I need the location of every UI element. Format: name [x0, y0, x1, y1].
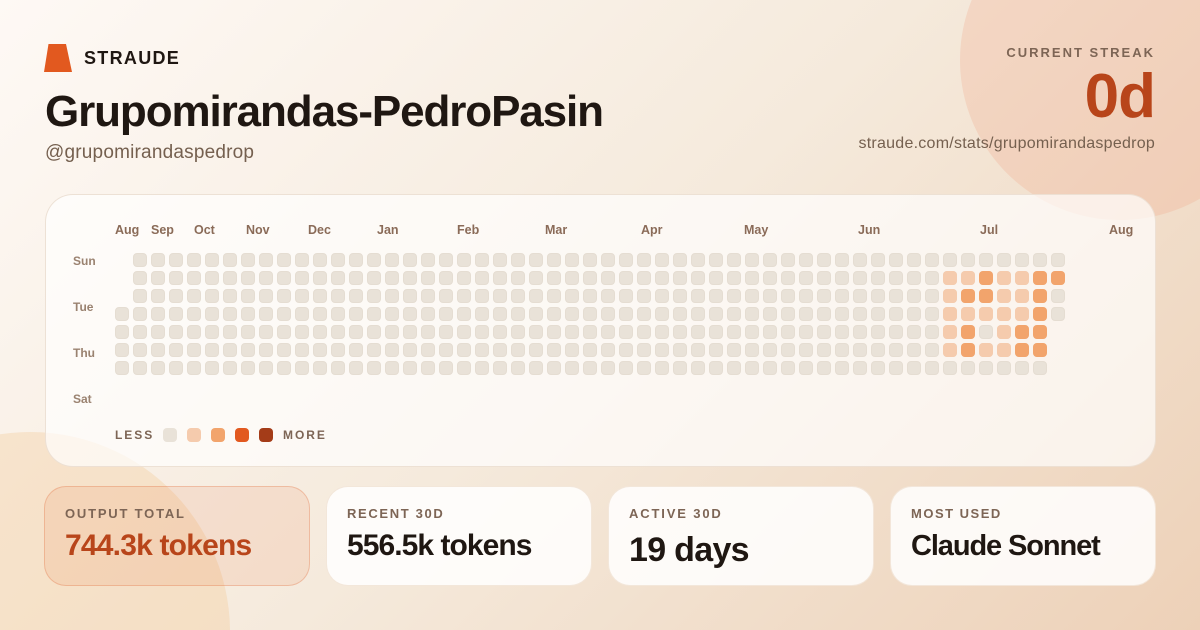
month labels: Mar	[545, 223, 567, 237]
legend less: LESS	[115, 428, 154, 442]
card: active 30d	[608, 486, 874, 586]
card: recent 30d	[326, 486, 592, 586]
streak value: 0d	[1085, 62, 1155, 131]
card label: MOST USED	[911, 506, 1002, 521]
month labels: Sep	[151, 223, 174, 237]
legend swatches	[163, 428, 273, 442]
panel: activity heatmap	[45, 194, 1156, 467]
card label: RECENT 30D	[347, 506, 444, 521]
month labels	[115, 223, 1133, 237]
month labels: Aug	[1109, 223, 1133, 237]
card value: 19 days	[629, 531, 749, 569]
card: output total	[44, 486, 310, 586]
month labels: Jan	[377, 223, 399, 237]
card value: Claude Sonnet	[911, 530, 1100, 562]
card: most used	[890, 486, 1156, 586]
stats url: straude.com/stats/grupomirandaspedrop	[858, 135, 1155, 152]
streak block	[858, 45, 1155, 152]
day labels	[73, 254, 96, 406]
legend	[115, 428, 327, 442]
streak label: CURRENT STREAK	[1006, 45, 1155, 60]
card label: ACTIVE 30D	[629, 506, 723, 521]
month labels: Dec	[308, 223, 331, 237]
month labels: Jul	[980, 223, 998, 237]
legend more: MORE	[283, 428, 327, 442]
month labels: Aug	[115, 223, 139, 237]
card value: 744.3k tokens	[65, 529, 251, 562]
logo mark	[44, 44, 72, 72]
month labels: Jun	[858, 223, 880, 237]
month labels: Oct	[194, 223, 215, 237]
handle: @grupomirandaspedrop	[45, 142, 254, 163]
month labels: Apr	[641, 223, 663, 237]
title: Grupomirandas-PedroPasin	[45, 87, 603, 136]
month labels: Feb	[457, 223, 479, 237]
brand name: STRAUDE	[84, 48, 180, 68]
day labels: Thu	[73, 346, 95, 360]
day labels: Sun	[73, 254, 96, 268]
day labels: Sat	[73, 392, 92, 406]
card label: OUTPUT TOTAL	[65, 506, 186, 521]
month labels: May	[744, 223, 768, 237]
day labels: Tue	[73, 300, 93, 314]
month labels: Nov	[246, 223, 270, 237]
card value: 556.5k tokens	[347, 529, 531, 562]
